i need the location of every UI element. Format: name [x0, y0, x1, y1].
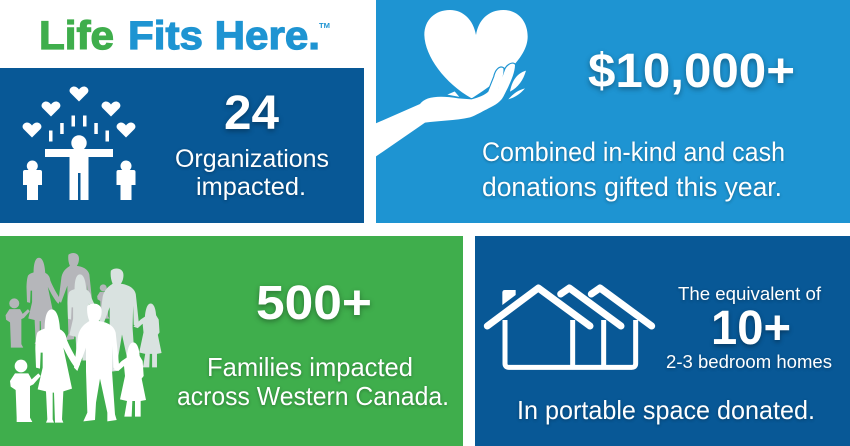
panel: organizations impacted: [0, 68, 364, 223]
stat: $10,000+: $10,000+: [588, 45, 795, 98]
caption: families impacted: Families impacted: [207, 352, 413, 382]
logo: Life Fits Here: TM: [319, 23, 330, 30]
caption: families impacted: across Western Canada.: [177, 381, 449, 411]
logo: Life Fits Here: [39, 14, 330, 58]
icon: hand holding heart: [368, 10, 528, 162]
caption: organizations impacted: Organizations: [175, 145, 329, 173]
stat: 500+: 500+: [256, 277, 372, 330]
stat: 10+: 10+: [711, 302, 791, 355]
caption: combined donations: Combined in-kind and cash: [482, 137, 785, 167]
panel: portable space: [475, 236, 850, 446]
stat: 24: 24: [224, 87, 279, 140]
text: the equivalent of: The equivalent of: [678, 284, 822, 304]
caption: organizations impacted: [175, 145, 329, 201]
text: 2-3 bedroom homes: 2-3 bedroom homes: [666, 352, 832, 372]
icon: three houses: [487, 288, 652, 367]
logo: Life Fits Here: Life: [39, 14, 114, 58]
caption: families impacted: [177, 352, 449, 411]
illustration: silhouettes of families: [6, 253, 162, 423]
caption: combined donations: [482, 137, 785, 202]
logo: Life Fits Here: Fits Here.: [128, 14, 320, 58]
icon: person with hearts and two people: [23, 86, 135, 200]
panel: families impacted: [0, 236, 463, 446]
panel: donations: [368, 0, 850, 223]
caption: portable space donated: In portable space donated.: [517, 395, 815, 425]
caption: combined donations: donations gifted this year.: [482, 172, 782, 202]
caption: organizations impacted: impacted.: [196, 173, 306, 201]
